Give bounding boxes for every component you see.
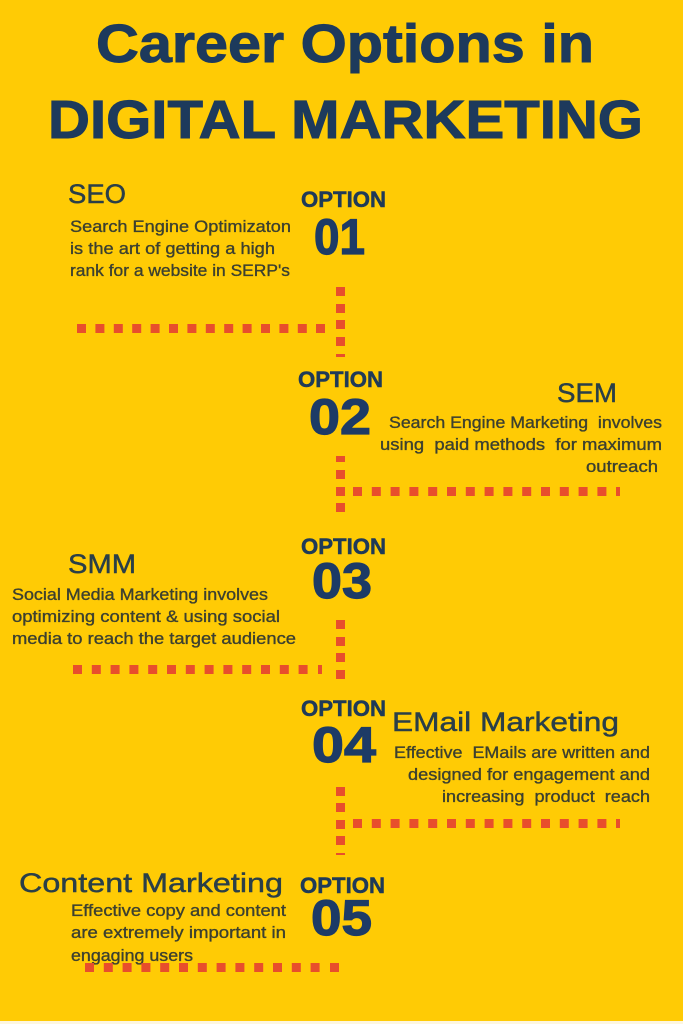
connector: dotted line 03 [73, 620, 345, 679]
heading: Content Marketing: Content Marketing [19, 868, 283, 898]
text block: Content description: engaging users [71, 947, 193, 965]
title: Career Options in [96, 14, 594, 74]
text block: Content description: Effective copy and content [71, 902, 286, 920]
badge: option 03: 03 [312, 553, 372, 609]
badge: option 01: OPTION [301, 187, 386, 212]
badge: option 03: OPTION [301, 534, 386, 559]
badge: option 04: 04 [312, 717, 376, 773]
text block: EMail description: increasing product reach [442, 788, 650, 806]
badge: option 05 [300, 873, 385, 946]
text block: SEM description: using paid methods for maximum [380, 436, 662, 454]
text block: SMM description: media to reach the target audience [12, 630, 296, 648]
connector: dotted line 01 [77, 287, 345, 357]
text block: SMM description [12, 586, 296, 648]
connector: dotted line 02 [336, 456, 620, 512]
panel: option 01 SEO [68, 179, 386, 357]
heading: SEM: SEM [557, 378, 617, 408]
text block: SEM description [380, 414, 662, 476]
text block: Content description: are extremely important in [71, 924, 286, 942]
text block: SEM description: Search Engine Marketing involves [389, 414, 662, 432]
badge: option 02: 02 [309, 389, 371, 445]
connector: dotted line 04 [336, 787, 620, 855]
panel: option 02 SEM [298, 367, 662, 512]
text block: SEM description: outreach [586, 458, 658, 476]
title: DIGITAL MARKETING [48, 90, 643, 150]
badge: option 01: 01 [314, 209, 365, 265]
text block: SMM description: optimizing content & using social [12, 608, 280, 626]
title [48, 14, 643, 150]
badge: option 02 [298, 367, 383, 445]
connector: dotted line 05 [85, 963, 339, 972]
badge: option 05: 05 [311, 890, 372, 946]
text block: SEO description: rank for a website in SERP's [70, 262, 290, 280]
text block: EMail description [394, 744, 650, 806]
badge: option 04 [301, 696, 386, 773]
badge: option 01 [301, 187, 386, 265]
panel: option 05 Content Marketing [19, 868, 385, 972]
badge: option 03 [301, 534, 386, 609]
text block: SMM description: Social Media Marketing involves [12, 586, 268, 604]
text block: EMail description: Effective EMails are written and [394, 744, 650, 762]
heading: EMail Marketing: EMail Marketing [392, 707, 619, 737]
badge: option 05: OPTION [300, 873, 385, 898]
badge: option 02: OPTION [298, 367, 383, 392]
badge: option 04: OPTION [301, 696, 386, 721]
panel: option 04 EMail Marketing [301, 696, 650, 855]
text block: SEO description: is the art of getting a high [70, 240, 275, 258]
text block: Content description [71, 902, 286, 965]
text block: SEO description [70, 218, 291, 280]
panel: option 03 SMM [12, 534, 386, 679]
text block: SEO description: Search Engine Optimizaton [70, 218, 291, 236]
heading: SEO: SEO [68, 179, 126, 209]
heading: SMM: SMM [68, 549, 136, 579]
text block: EMail description: designed for engagement and [408, 766, 650, 784]
